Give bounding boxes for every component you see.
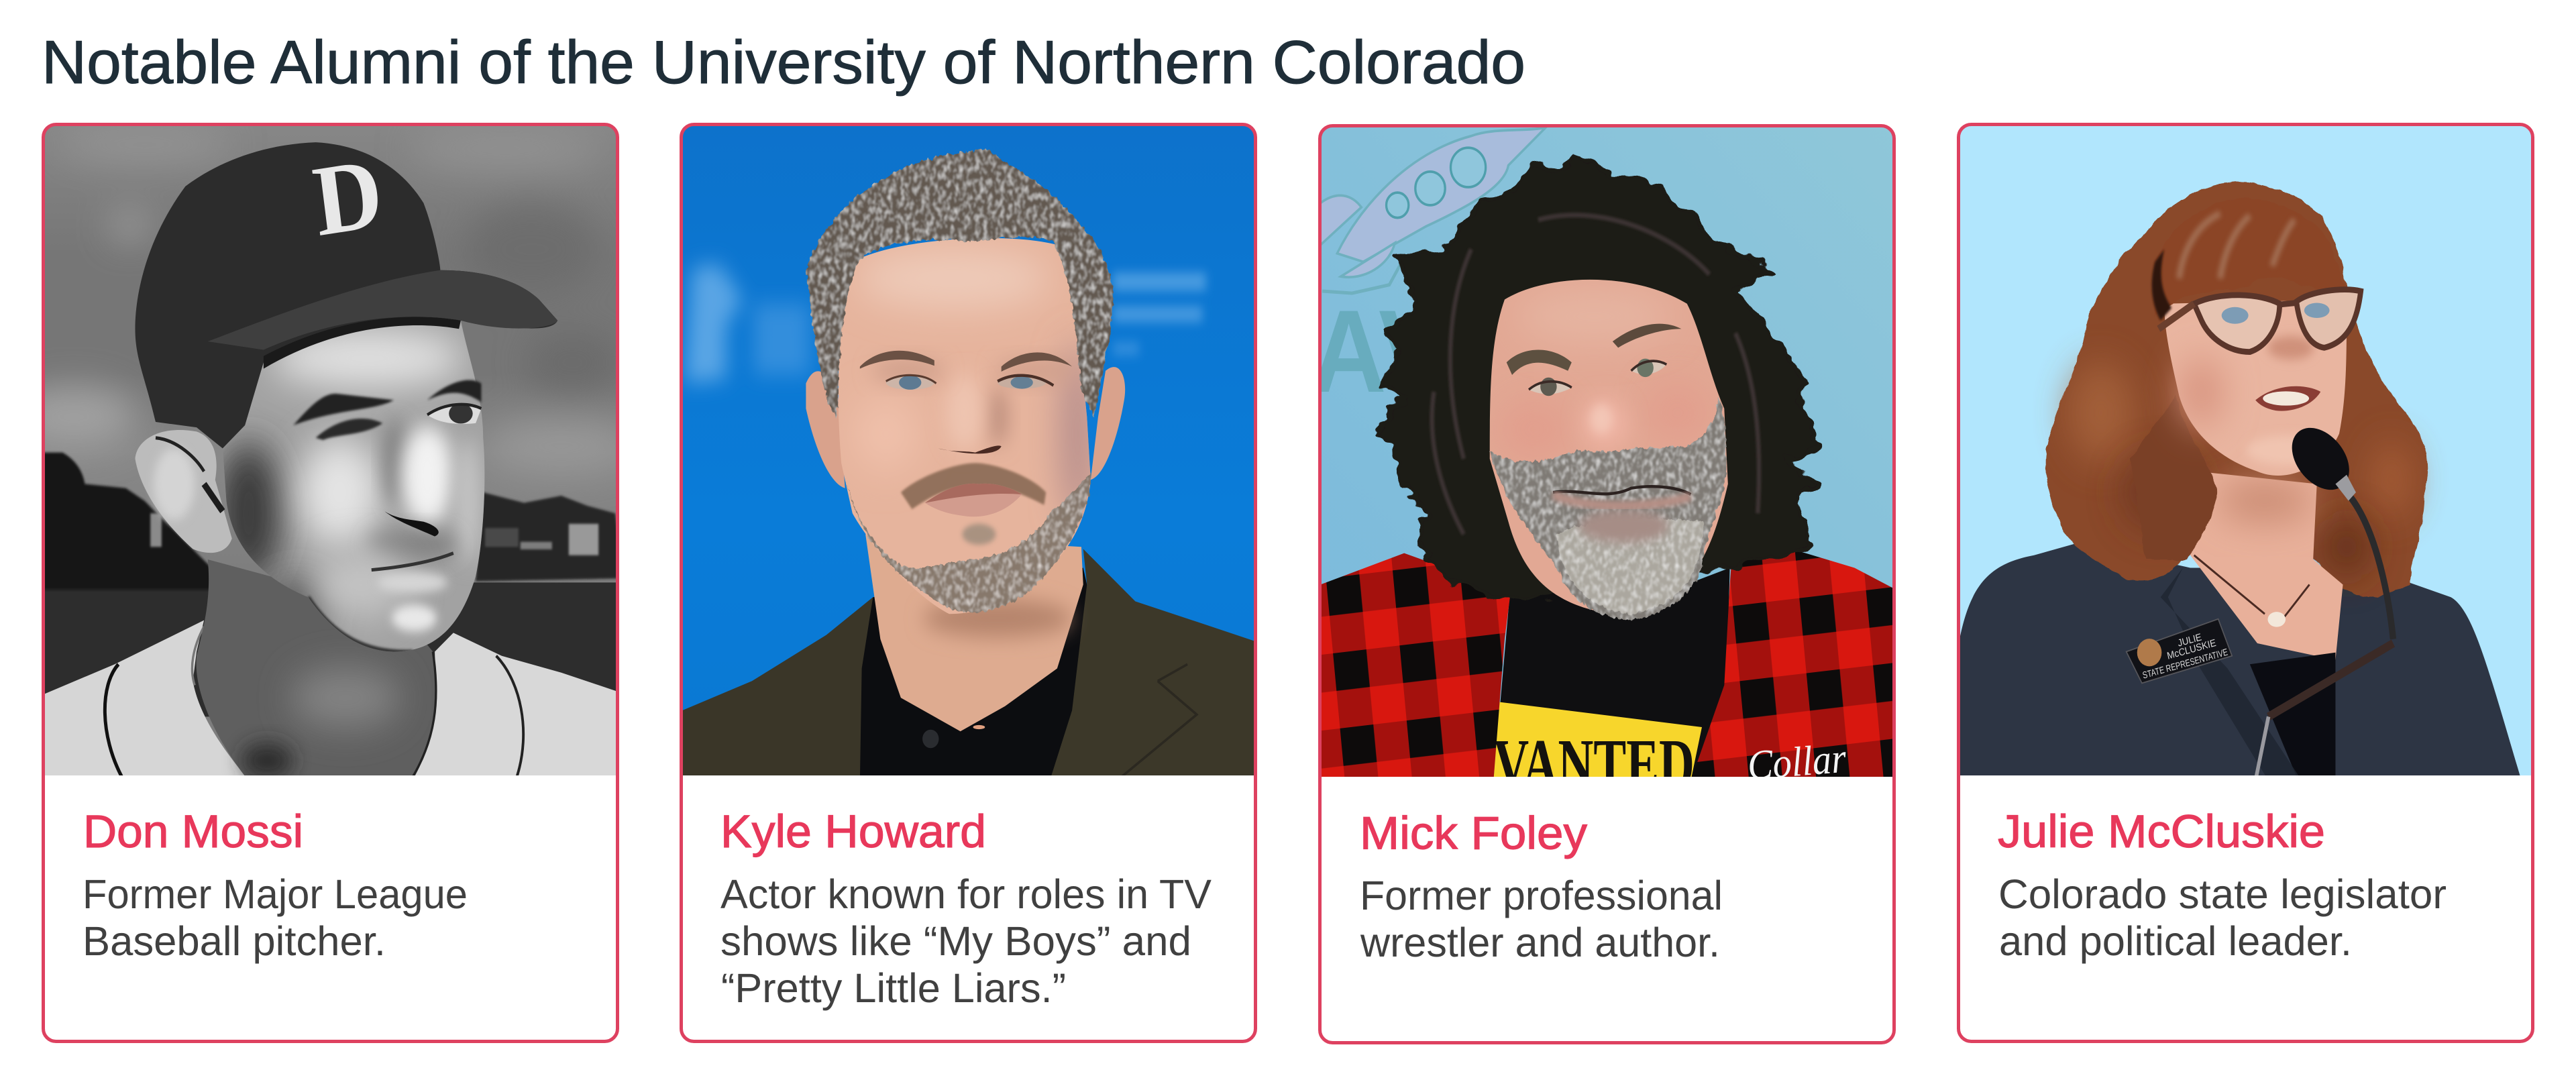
description: Julie McCluskie: Colorado state legislator: [1998, 871, 2447, 917]
cap: [135, 137, 557, 448]
card frame: [1959, 125, 2533, 1041]
face: [839, 238, 1091, 614]
panel: Kyle Howard card: [678, 123, 1261, 1041]
description: Don Mossi: [83, 871, 468, 964]
panel: Mick Foley card: [1311, 123, 1898, 1042]
beard: [845, 463, 1091, 612]
hair: [1377, 157, 1821, 599]
name: Kyle Howard: Kyle Howard: [720, 806, 986, 857]
facial features: [860, 351, 1072, 453]
description: Kyle Howard: “Pretty Little Liars.”: [721, 965, 1066, 1011]
flannel shirt: [1315, 551, 1898, 789]
name: Julie McCluskie: Julie McCluskie: [1998, 806, 2325, 857]
flannel shirt: Collar: [1746, 735, 1848, 789]
hair lock over neck: [2131, 396, 2218, 559]
facial features: [293, 380, 481, 570]
backdrop rocket: AV: [1311, 286, 1448, 417]
glasses: [2159, 290, 2361, 352]
card frame: [682, 125, 1256, 1041]
hair: [2045, 182, 2428, 598]
top: [2250, 653, 2335, 781]
backdrop rocket: [1311, 127, 1546, 417]
photo: Don Mossi portrait: [11, 123, 636, 781]
card frame: [43, 125, 617, 1041]
name badge: STATE REPRESENTATIVE: [2141, 647, 2229, 681]
necklace: [2194, 555, 2310, 627]
name: Don Mossi: Don Mossi: [83, 806, 303, 857]
lapel: [2161, 567, 2302, 781]
description: Kyle Howard: shows like “My Boys” and: [720, 918, 1191, 964]
panel: Don Mossi card: [11, 123, 636, 1041]
name badge: McCLUSKIE: [2166, 637, 2217, 662]
name badge: [2127, 619, 2232, 683]
name: Mick Foley: Mick Foley: [1360, 808, 1587, 859]
name badge: JULIE: [2177, 632, 2203, 649]
jacket: [678, 549, 1261, 781]
card frame: [1320, 126, 1894, 1042]
t-shirt: [1493, 567, 1730, 804]
ears: [806, 367, 1125, 488]
microphone: [2255, 415, 2393, 781]
face: [223, 317, 484, 652]
panel: Julie McCluskie card: [1952, 123, 2536, 1041]
description: Mick Foley: [1360, 873, 1723, 965]
photo: Kyle Howard portrait: [678, 123, 1261, 781]
jersey: [40, 620, 624, 781]
t-shirt lettering: VANTED: [1493, 724, 1695, 804]
title: Notable Alumni of the University of Northern Colorado: [42, 29, 1525, 97]
ear: [135, 430, 232, 553]
photo: Julie McCluskie portrait: [1952, 123, 2536, 781]
description: Mick Foley: wrestler and author.: [1360, 920, 1720, 965]
description: Don Mossi: Baseball pitcher.: [83, 918, 386, 964]
shirt: [860, 567, 1087, 781]
mouth: [2255, 386, 2320, 411]
description: Julie McCluskie: [1998, 871, 2447, 964]
hair: [806, 149, 1113, 417]
photo: Mick Foley portrait: [1311, 123, 1898, 804]
neck: [196, 559, 436, 781]
jacket: [1960, 543, 2522, 781]
bangs: [2152, 199, 2347, 321]
description: Kyle Howard: Actor known for roles in TV: [720, 871, 1212, 917]
facial features: [1507, 324, 1681, 396]
description: Mick Foley: Former professional: [1360, 873, 1723, 918]
face: [1490, 280, 1728, 614]
neck: [865, 534, 1083, 731]
description: Julie McCluskie: and political leader.: [1999, 918, 2352, 964]
cap logo: D: [308, 137, 388, 258]
face: [2164, 299, 2347, 476]
neck and chest: [2190, 472, 2343, 660]
beard: [1490, 396, 1727, 620]
description: Kyle Howard: [720, 871, 1212, 1011]
description: Don Mossi: Former Major League: [83, 871, 468, 917]
